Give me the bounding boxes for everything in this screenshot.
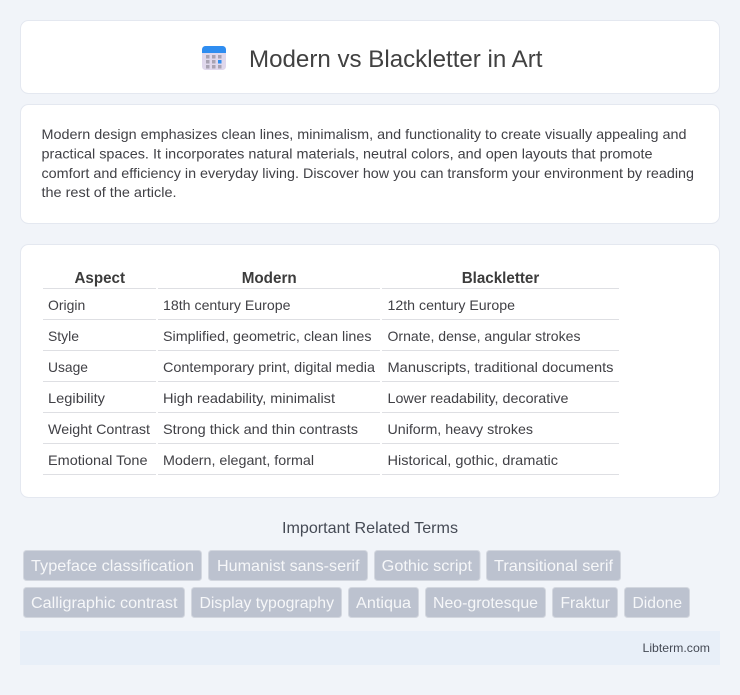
tag: fraktur: [552, 588, 618, 618]
tag: transitional serif: [486, 550, 620, 580]
table header row: Aspect: [74, 270, 126, 287]
tag: humanist sans-serif: [208, 550, 368, 580]
table header row: Modern: [242, 270, 297, 287]
table row: style: Simplified, geometric, clean lines: [163, 328, 372, 344]
table row: weight contrast: Weight Contrast: [48, 421, 150, 437]
tag: gothic script: [374, 550, 480, 580]
table row: legibility: [48, 390, 569, 406]
tag: antiqua: Antiqua: [356, 595, 411, 612]
table row: style: Style: [48, 328, 79, 344]
title: Modern vs Blackletter in Art: [249, 46, 543, 73]
table row: origin: [48, 297, 515, 313]
tag: typeface classification: [24, 550, 202, 580]
table row: emotional tone: Modern, elegant, formal: [163, 452, 314, 468]
table row: style: [48, 328, 580, 344]
tag: didone: Didone: [632, 595, 682, 612]
tag: display typography: Display typography: [200, 595, 334, 612]
tag: display typography: [192, 588, 342, 618]
table row: legibility: Lower readability, decorative: [388, 390, 569, 406]
tag: antiqua: [348, 588, 418, 618]
table row: usage: Usage: [48, 359, 88, 375]
tag: transitional serif: Transitional serif: [494, 558, 614, 575]
text block: intro line 1: Modern design emphasizes clean lines, minimalism, and functionality to create visually appealing and: [42, 126, 686, 142]
table row: origin: 18th century Europe: [163, 297, 291, 313]
tag: neo-grotesque: Neo-grotesque: [433, 595, 538, 612]
tag: humanist sans-serif: Humanist sans-serif: [217, 558, 360, 575]
table row: legibility: Legibility: [48, 390, 105, 406]
heading: important related terms: Important Related Terms: [282, 520, 458, 537]
text block: intro line 2: practical spaces. It incorporates natural materials, neutral colors, and open layouts that promote: [42, 146, 653, 162]
table row: weight contrast: [48, 421, 533, 437]
table row: usage: Manuscripts, traditional documents: [388, 359, 614, 375]
tag: didone: [624, 588, 690, 618]
table header row: [74, 270, 539, 287]
tag: gothic script: Gothic script: [382, 558, 473, 575]
table row: origin: Origin: [48, 297, 85, 313]
footer credit: Libterm.com: [642, 641, 710, 655]
tag: fraktur: Fraktur: [560, 595, 611, 612]
tag: typeface classification: Typeface classification: [31, 558, 194, 575]
panel: header: [20, 20, 720, 94]
table row: usage: [48, 359, 614, 375]
table row: usage: Contemporary print, digital media: [163, 359, 375, 375]
tag: neo-grotesque: [426, 588, 546, 618]
text block: intro line 3: comfort and efficiency in everyday living. Discover how you can transform your environment by reading: [42, 165, 694, 181]
panel: introduction: [20, 104, 720, 224]
table row: style: Ornate, dense, angular strokes: [388, 328, 580, 344]
table row: emotional tone: Historical, gothic, dramatic: [388, 452, 558, 468]
table row: emotional tone: [48, 452, 558, 468]
tag: calligraphic contrast: Calligraphic contrast: [31, 595, 178, 612]
tag: calligraphic contrast: [24, 588, 184, 618]
table row: origin: 12th century Europe: [388, 297, 515, 313]
table row: weight contrast: Strong thick and thin contrasts: [163, 421, 358, 437]
icon: calendar: [202, 46, 226, 70]
text block: intro line 4: the rest of the article.: [42, 184, 176, 200]
table header row: Blackletter: [462, 270, 539, 287]
table row: weight contrast: Uniform, heavy strokes: [388, 421, 533, 437]
table row: legibility: High readability, minimalist: [163, 390, 335, 406]
panel: related term tags: [24, 550, 690, 618]
footer: [20, 631, 720, 665]
table row: emotional tone: Emotional Tone: [48, 452, 148, 468]
panel: comparison table: [20, 244, 720, 498]
